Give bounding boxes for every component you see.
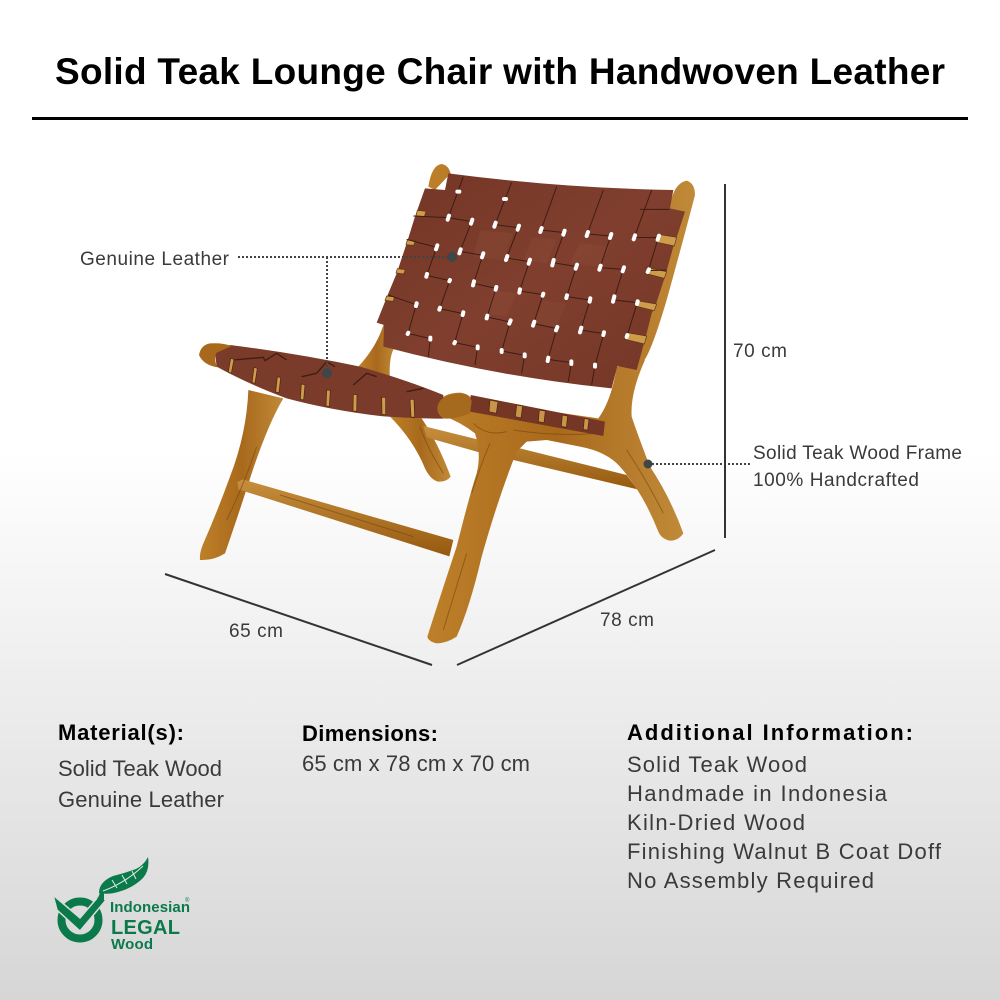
logo leaf: [99, 857, 148, 894]
dimension: depth: [457, 550, 715, 665]
title: Solid Teak Lounge Chair with Handwoven Leather: [55, 51, 945, 92]
back tan strap ends: [385, 210, 677, 344]
logo registered mark: ®: [185, 897, 190, 904]
left back post: [358, 325, 395, 380]
logo word Indonesian: Indonesian: [110, 899, 190, 916]
depth line: [457, 550, 715, 665]
logo: Indonesian Legal Wood: [53, 857, 190, 953]
dimensions value: 65 cm x 78 cm x 70 cm: [302, 751, 530, 776]
side rail and back leg: [427, 360, 683, 643]
right arm knob: [437, 393, 472, 419]
logo word Wood: Wood: [111, 936, 153, 953]
wood grain: [227, 402, 663, 630]
callout: teak frame: [644, 443, 962, 491]
weave seams: [388, 177, 669, 385]
seat: [215, 345, 443, 419]
additional item 1: Solid Teak Wood: [627, 752, 807, 777]
width label: 65 cm: [229, 621, 283, 642]
dimensions heading: Dimensions:: [302, 721, 438, 746]
dimensions block: [302, 721, 530, 776]
seat zigzag seams: [233, 353, 423, 392]
height label: 70 cm: [733, 341, 787, 362]
materials heading: Material(s):: [58, 720, 184, 745]
callout: genuine leather: [80, 249, 457, 378]
woven leather back: [377, 173, 685, 388]
depth label: 78 cm: [600, 610, 654, 631]
logo word LEGAL: LEGAL: [111, 917, 180, 939]
right strip tan gaps: [489, 400, 589, 430]
logo leaf veins: [103, 866, 143, 891]
front left leg: [200, 390, 283, 560]
seat tan strap gaps: [228, 358, 415, 417]
frame label line 1: Solid Teak Wood Frame: [753, 443, 962, 464]
frame label line 2: 100% Handcrafted: [753, 470, 919, 491]
additional item 2: Handmade in Indonesia: [627, 781, 888, 806]
dimension: width: [165, 574, 432, 665]
leader line and dot: [648, 463, 750, 465]
chair upper frame and leather: [199, 164, 695, 436]
weave holes: [408, 192, 659, 367]
rear stretcher: [423, 426, 637, 489]
leather strap highlights: [473, 230, 610, 327]
materials item 1: Solid Teak Wood: [58, 756, 222, 781]
seat left knob: [199, 343, 232, 367]
back top posts: [428, 164, 695, 367]
callout dots: [322, 252, 457, 378]
logo ring: [62, 902, 98, 938]
materials block: [58, 720, 224, 812]
rear leg: [390, 417, 451, 482]
chair lower frame: [200, 360, 683, 643]
additional item 5: No Assembly Required: [627, 868, 874, 893]
logo check mark: [53, 895, 106, 931]
height line: [724, 184, 726, 538]
right side leather strip: [470, 395, 605, 436]
width line: [165, 574, 432, 665]
callout label: Genuine Leather: [80, 249, 230, 270]
additional item 3: Kiln-Dried Wood: [627, 810, 805, 835]
front stretcher: [237, 479, 453, 556]
additional item 4: Finishing Walnut B Coat Doff: [627, 839, 942, 864]
frame dot: [644, 460, 652, 468]
chair illustration: [199, 164, 695, 643]
title rule: [32, 117, 968, 120]
materials item 2: Genuine Leather: [58, 787, 224, 812]
callout leader lines: [238, 257, 452, 373]
logo stem: [97, 890, 104, 900]
additional information block: [627, 720, 942, 893]
additional heading: Additional Information:: [627, 720, 913, 745]
